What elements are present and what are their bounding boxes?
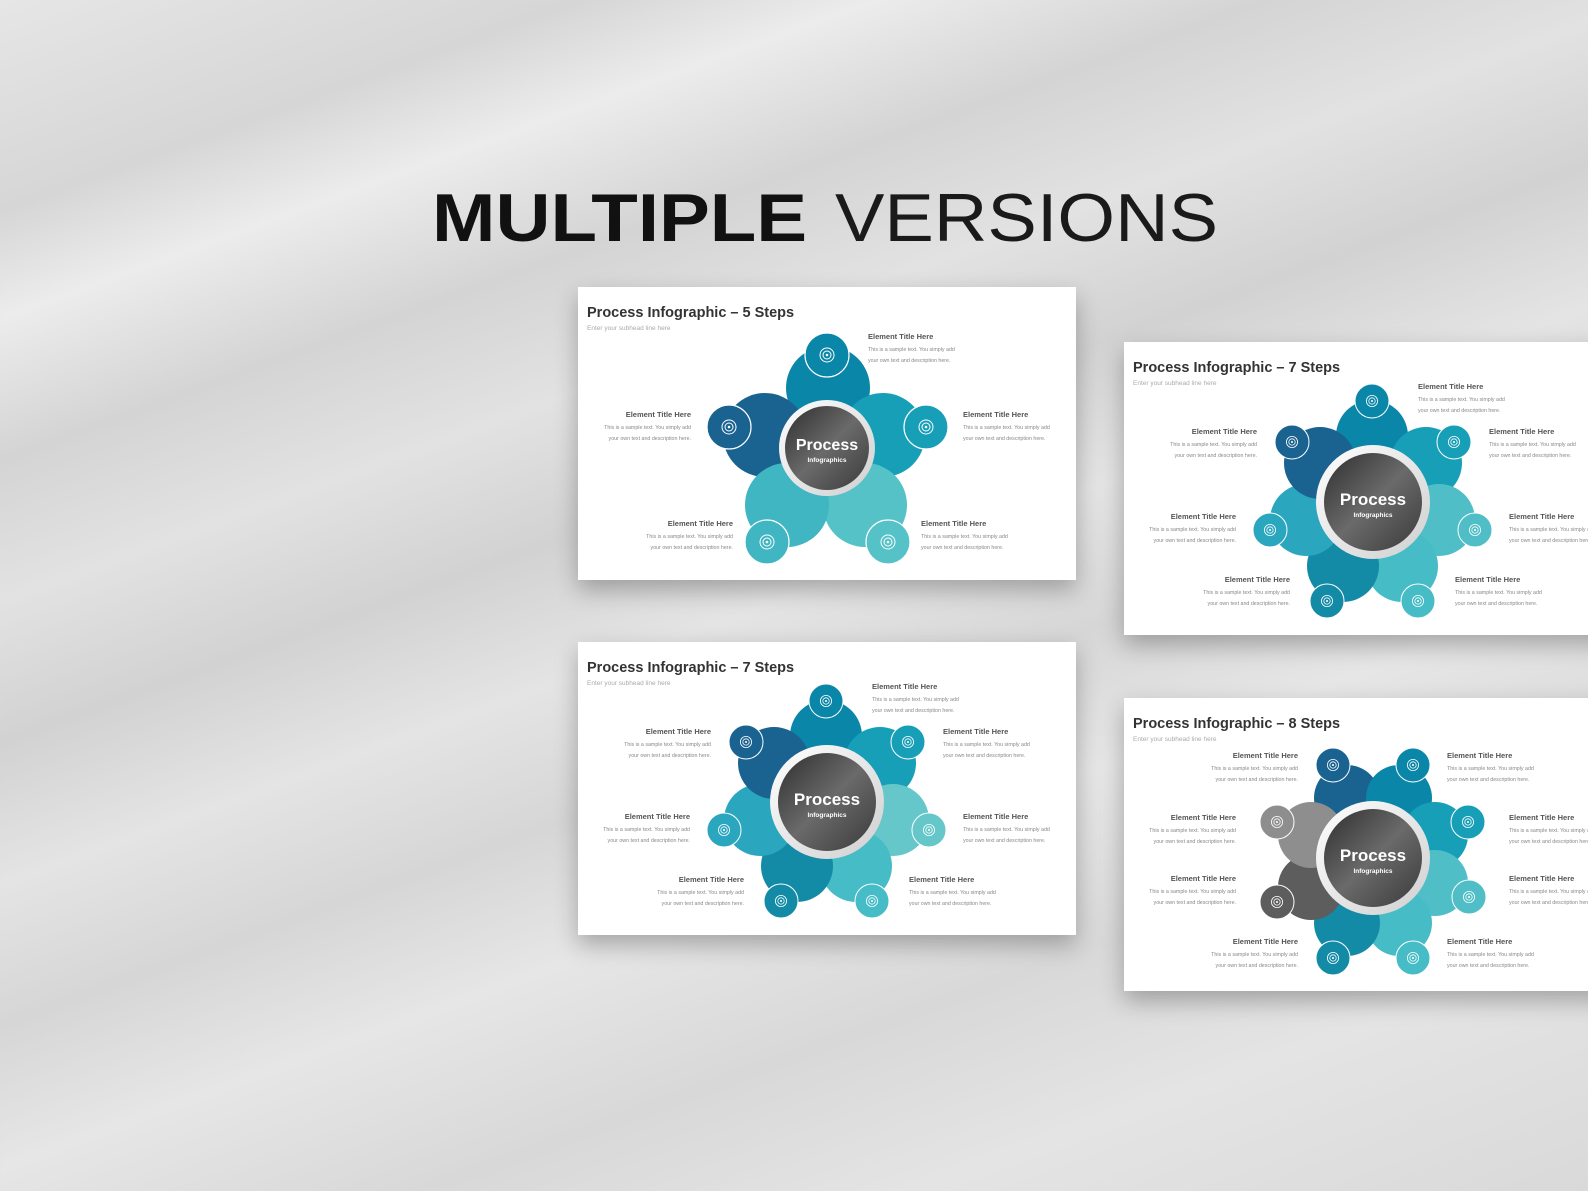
center circle: Infographics xyxy=(807,457,847,464)
center circle: Process xyxy=(794,790,860,809)
petals xyxy=(724,700,929,902)
center circle: Infographics xyxy=(1353,868,1393,875)
slide title: Process Infographic – 7 Steps xyxy=(587,660,794,676)
panel: 7 steps slide (left) xyxy=(578,642,1076,935)
panel: 7 steps slide (right) xyxy=(1124,342,1588,635)
center circle xyxy=(770,745,884,859)
slide title: Process Infographic – 5 Steps xyxy=(587,305,794,321)
subhead: Enter your subhead line here xyxy=(1133,380,1217,387)
text blocks xyxy=(1149,382,1588,607)
center circle: Infographics xyxy=(807,812,847,819)
petals xyxy=(1278,765,1468,956)
slide title: Process Infographic – 8 Steps xyxy=(1133,716,1340,732)
panel: 5 steps slide xyxy=(578,287,1076,580)
petals xyxy=(1270,400,1475,602)
title: VERSIONS xyxy=(835,180,1218,256)
text blocks xyxy=(604,332,1050,551)
center circle xyxy=(1316,801,1430,915)
icons xyxy=(1253,384,1492,618)
subhead: Enter your subhead line here xyxy=(587,680,671,687)
center circle: Process xyxy=(1340,490,1406,509)
center circle: Process xyxy=(796,437,858,454)
petals xyxy=(723,346,925,547)
panel: 8 steps slide xyxy=(1124,698,1588,991)
text blocks xyxy=(1149,751,1588,969)
center circle: Process xyxy=(1340,846,1406,865)
icons xyxy=(707,333,948,564)
title xyxy=(432,180,1218,256)
title: MULTIPLE xyxy=(432,180,807,256)
text blocks xyxy=(603,682,1050,907)
center circle: Infographics xyxy=(1353,512,1393,519)
center circle xyxy=(779,400,875,496)
slide title: Process Infographic – 7 Steps xyxy=(1133,360,1340,376)
subhead: Enter your subhead line here xyxy=(587,325,671,332)
icons xyxy=(707,684,946,918)
subhead: Enter your subhead line here xyxy=(1133,736,1217,743)
icons xyxy=(1260,748,1486,975)
center circle xyxy=(1316,445,1430,559)
